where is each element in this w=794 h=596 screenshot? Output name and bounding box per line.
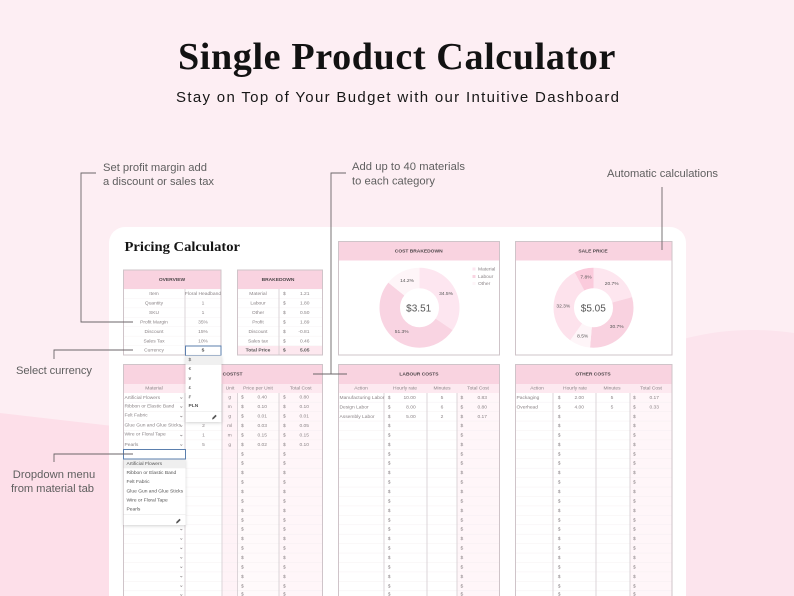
panel: other costs table — [516, 364, 672, 596]
panel: material costs table: 2 — [202, 423, 205, 429]
panel: material costs table: 0.15 — [299, 432, 309, 438]
panel: sale price chart — [516, 242, 672, 355]
panel: material costs table: $ — [241, 517, 244, 523]
panel: material costs table: ml — [227, 423, 232, 429]
panel: sale price chart: 7.8% — [580, 275, 592, 281]
panel: other costs table: $ — [633, 480, 636, 486]
panel: material costs table: Unit — [226, 386, 235, 392]
panel: brakedown: 1.80 — [300, 301, 310, 307]
panel: brakedown: 0.50 — [300, 310, 310, 316]
panel: material costs table: $ — [241, 461, 244, 467]
panel: other costs table: 0.33 — [649, 404, 659, 410]
panel: material costs table: $ — [283, 564, 286, 570]
panel: material costs table: 5 — [202, 442, 205, 448]
panel: material costs table: $ — [283, 395, 286, 401]
panel: other costs table: $ — [558, 555, 561, 561]
icon: pencil — [176, 519, 181, 524]
panel: material costs table: 0.80 — [299, 395, 309, 401]
panel: material costs table: 1 — [202, 432, 205, 438]
panel: other costs table: Packaging — [516, 395, 540, 401]
panel: labour costs table: $ — [388, 442, 391, 448]
callout: add materials: to each category — [352, 176, 435, 188]
panel: overview: Sales Tax — [143, 338, 165, 344]
panel: material costs table — [124, 364, 322, 596]
panel: material costs table: 0.05 — [299, 423, 309, 429]
panel: labour costs table: $ — [460, 498, 464, 504]
panel: other costs table: 0.17 — [649, 395, 659, 401]
panel: material costs table: $ — [283, 470, 286, 476]
panel: brakedown: Labour — [250, 301, 266, 307]
panel: material costs table: $ — [283, 574, 286, 580]
panel: other costs table: 2.00 — [574, 395, 584, 401]
panel: material costs table: $ — [241, 527, 244, 533]
panel: material costs table: $ — [283, 414, 286, 420]
panel: other costs table: $ — [633, 442, 636, 448]
panel: other costs table: $ — [633, 564, 636, 570]
panel: labour costs table: 10.00 — [403, 395, 416, 401]
currency dropdown — [186, 356, 222, 422]
panel: material costs table: 0.02 — [257, 442, 267, 448]
panel: material costs table: $ — [283, 451, 286, 457]
panel: material costs table: $ — [241, 480, 244, 486]
panel: other costs table: $ — [558, 395, 561, 401]
panel: labour costs table: $ — [460, 489, 464, 495]
callout: automatic calculations: Automatic calculations — [607, 168, 718, 180]
panel: other costs table: $ — [633, 470, 636, 476]
panel: labour costs table: 5.00 — [406, 414, 416, 420]
callout: add materials: Add up to 40 materials — [352, 161, 465, 173]
panel: overview — [124, 270, 221, 356]
panel: overview: 35% — [198, 320, 209, 326]
panel: labour costs table: LABOUR COSTS — [399, 372, 439, 378]
title: Single Product Calculator — [178, 36, 616, 78]
panel: other costs table: 5 — [611, 395, 614, 401]
panel: material costs table: $ — [241, 546, 244, 552]
callout: select currency: Select currency — [16, 365, 92, 377]
panel: other costs table: $ — [558, 432, 561, 438]
panel: labour costs table: 0.80 — [477, 404, 487, 410]
panel: other costs table: $ — [633, 527, 636, 533]
panel: other costs table: $ — [633, 432, 636, 438]
panel: other costs table: $ — [558, 470, 561, 476]
panel: other costs table: $ — [558, 574, 561, 580]
panel: labour costs table: 5 — [441, 395, 444, 401]
material dropdown: Ribbon or Elastic Band — [126, 470, 177, 476]
panel: other costs table: Minutes — [603, 386, 621, 392]
panel: labour costs table: Assembly Labor — [340, 414, 375, 420]
panel: other costs table: Total Cost — [640, 386, 663, 392]
panel: material costs table: $ — [283, 527, 286, 533]
panel: material costs table: $ — [241, 555, 244, 561]
callout: dropdown menu — [11, 454, 133, 495]
panel: material costs table: $ — [283, 508, 286, 514]
panel: other costs table: $ — [558, 583, 561, 589]
panel: material costs table: $ — [241, 451, 244, 457]
panel: labour costs table: $ — [388, 498, 391, 504]
panel: labour costs table: $ — [460, 395, 464, 401]
panel: labour costs table: $ — [388, 451, 391, 457]
panel: brakedown: $ — [283, 310, 286, 316]
panel: material costs table: $ — [283, 461, 286, 467]
panel: brakedown: $ — [283, 301, 286, 307]
panel: labour costs table: $ — [388, 508, 391, 514]
panel: cost breakdown chart: 14.2% — [400, 278, 415, 284]
panel: brakedown: Other — [252, 310, 264, 316]
panel: labour costs table: $ — [388, 574, 391, 580]
legend — [472, 267, 495, 287]
panel: material costs table: $ — [283, 583, 286, 589]
legend: Other — [478, 281, 491, 287]
panel: material costs table: 0.01 — [299, 414, 309, 420]
callout: select currency — [16, 350, 133, 377]
dashboard card — [109, 227, 686, 596]
panel: labour costs table: $ — [388, 564, 391, 570]
panel: other costs table: 5 — [611, 404, 614, 410]
panel: other costs table: $ — [558, 461, 561, 467]
currency dropdown: $ — [188, 357, 192, 363]
panel: labour costs table: $ — [460, 432, 464, 438]
subtitle: Stay on Top of Your Budget with our Intuitive Dashboard — [176, 89, 619, 106]
panel: labour costs table: $ — [460, 461, 464, 467]
panel: material costs table: $ — [241, 489, 244, 495]
currency dropdown: PLN — [188, 403, 199, 409]
currency dropdown: € — [188, 366, 192, 372]
panel: labour costs table: $ — [460, 574, 464, 580]
panel: material costs table: g — [228, 396, 231, 401]
panel: material costs table: g — [228, 415, 231, 420]
material dropdown — [124, 450, 186, 525]
panel: brakedown: 0.46 — [300, 338, 310, 344]
panel: other costs table: $ — [558, 451, 561, 457]
callout: profit margin: a discount or sales tax — [103, 176, 214, 188]
panel: material costs table: $ — [283, 517, 286, 523]
panel: labour costs table: Manufacturing Labor — [340, 395, 385, 401]
panel: other costs table: OTHER COSTS — [575, 372, 611, 378]
panel: labour costs table: $ — [460, 546, 464, 552]
panel: material costs table: Total Cost — [290, 386, 312, 392]
panel: material costs table: $ — [241, 414, 244, 420]
material dropdown: Artificial Flowers — [126, 461, 163, 467]
panel: material costs table: 0.10 — [299, 404, 309, 410]
panel: labour costs table: Action — [354, 386, 368, 392]
panel: material costs table: 0.40 — [257, 395, 267, 401]
panel: other costs table: $ — [558, 404, 561, 410]
panel: brakedown: Total Price — [246, 348, 271, 354]
panel: material costs table: $ — [283, 432, 286, 438]
panel: other costs table: $ — [633, 583, 636, 589]
panel: material costs table: $ — [241, 564, 244, 570]
panel: material costs table: Pearls — [124, 442, 139, 448]
panel: other costs table: $ — [558, 508, 561, 514]
currency dropdown: ₣ — [188, 395, 192, 401]
callout: dropdown menu: from material tab — [11, 483, 94, 495]
panel: other costs table: $ — [633, 574, 636, 580]
panel: labour costs table: $ — [388, 527, 391, 533]
panel: sale price chart: SALE PRICE — [578, 249, 608, 255]
panel: other costs table: $ — [633, 395, 636, 401]
panel: material costs table: $ — [241, 574, 244, 580]
panel: other costs table: $ — [633, 517, 636, 523]
panel: material costs table: $ — [241, 404, 244, 410]
panel: labour costs table: $ — [460, 583, 464, 589]
panel: overview: Profit Margin — [140, 320, 168, 326]
panel: material costs table: $ — [283, 546, 286, 552]
panel: material costs table: 0.10 — [299, 442, 309, 448]
material dropdown: Pearls — [126, 507, 141, 513]
panel: overview: 1 — [202, 310, 205, 316]
panel: material costs table: 0.10 — [257, 404, 267, 410]
panel: brakedown — [238, 270, 322, 355]
panel: overview: Floral Headband — [185, 291, 221, 297]
panel: overview: 10% — [198, 338, 209, 344]
panel: labour costs table: $ — [388, 423, 391, 429]
panel: brakedown: BRAKEDOWN — [262, 277, 295, 283]
panel: material costs table: $ — [283, 480, 286, 486]
panel: sale price chart: 8.5% — [577, 334, 589, 340]
material dropdown: Felt Fabric — [126, 479, 150, 485]
panel: labour costs table: Hourly rate — [393, 386, 417, 392]
panel: labour costs table: $ — [388, 432, 391, 438]
panel: other costs table: $ — [633, 451, 636, 457]
panel: labour costs table: $ — [388, 414, 391, 420]
donut: cost breakdown — [390, 278, 449, 337]
panel: other costs table: $ — [558, 442, 561, 448]
panel: material costs table: m — [228, 405, 232, 410]
panel: other costs table: $ — [558, 517, 561, 523]
legend: Material — [478, 267, 495, 273]
callout: add materials — [313, 161, 465, 374]
panel: material costs table: $ — [241, 442, 244, 448]
panel: labour costs table: $ — [460, 480, 464, 486]
panel: labour costs table: $ — [388, 583, 391, 589]
callout: automatic calculations — [607, 168, 718, 250]
panel: labour costs table: 0.83 — [477, 395, 487, 401]
panel: brakedown: Material — [249, 291, 267, 297]
panel: other costs table: $ — [558, 414, 561, 420]
panel: material costs table: $ — [241, 423, 244, 429]
panel: cost breakdown chart: 51.3% — [395, 329, 409, 335]
panel: other costs table: $ — [558, 423, 561, 429]
panel: sale price chart: 30.7% — [610, 324, 624, 330]
panel: other costs table: $ — [558, 480, 561, 486]
material dropdown: Wire or Floral Tape — [126, 498, 168, 504]
panel: material costs table: $ — [241, 536, 244, 542]
card heading: Pricing Calculator — [124, 240, 240, 255]
panel: other costs table: 4.00 — [574, 404, 584, 410]
panel: material costs table: $ — [241, 470, 244, 476]
panel: cost breakdown chart: COST BRAKEDOWN — [395, 249, 443, 255]
panel: other costs table: $ — [633, 536, 636, 542]
panel: material costs table: g — [228, 443, 231, 448]
panel: overview: Discount — [144, 329, 164, 335]
panel: labour costs table: $ — [460, 536, 464, 542]
panel: other costs table: $ — [558, 498, 561, 504]
panel: labour costs table: 6 — [441, 404, 444, 410]
panel: labour costs table: Minutes — [433, 386, 451, 392]
currency dropdown: £ — [188, 385, 192, 391]
panel: other costs table: $ — [558, 536, 561, 542]
panel: labour costs table: Total Cost — [467, 386, 490, 392]
panel: labour costs table: $ — [388, 480, 391, 486]
panel: labour costs table: $ — [460, 517, 464, 523]
panel: other costs table: Overhead — [516, 404, 538, 410]
panel: sale price chart: 20.7% — [605, 281, 619, 287]
panel: labour costs table: $ — [388, 517, 391, 523]
panel: brakedown: 1.89 — [300, 320, 310, 326]
panel: labour costs table: $ — [460, 470, 464, 476]
panel: other costs table: $ — [633, 489, 636, 495]
panel: labour costs table: $ — [388, 470, 391, 476]
panel: brakedown: $ — [283, 320, 286, 326]
panel: labour costs table: $ — [460, 423, 464, 429]
panel: material costs table: Material — [145, 386, 163, 392]
panel: material costs table: Felt Fabric — [124, 413, 148, 419]
panel: overview: Currency — [144, 348, 164, 354]
panel: other costs table: $ — [633, 555, 636, 561]
panel: material costs table: 0.01 — [257, 414, 267, 420]
panel: sale price chart: 32.3% — [556, 303, 571, 309]
panel: overview: OVERVIEW — [159, 277, 186, 283]
currency dropdown: ¥ — [188, 376, 192, 382]
panel: other costs table: $ — [633, 414, 636, 420]
panel: other costs table: $ — [633, 404, 636, 410]
panel: labour costs table: $ — [388, 395, 391, 401]
panel: brakedown: Profit — [252, 320, 264, 326]
panel: material costs table: $ — [283, 423, 286, 429]
panel: brakedown: $ — [283, 338, 286, 344]
panel: material costs table: Glue Gun and Glue Sticks — [124, 422, 182, 428]
panel: material costs table: 0.15 — [257, 432, 267, 438]
panel: material costs table: Artificial Flowers — [124, 395, 161, 401]
panel: labour costs table: $ — [388, 555, 391, 561]
panel: material costs table: $ — [241, 395, 244, 401]
panel: other costs table: $ — [633, 461, 636, 467]
panel: material costs table: $ — [241, 432, 244, 438]
panel: overview: Item — [149, 291, 159, 297]
panel: brakedown: $ — [283, 348, 286, 354]
panel: labour costs table: 0.17 — [477, 414, 487, 420]
material dropdown: Glue Gun and Glue Sticks — [126, 488, 184, 494]
panel: overview: SKU — [149, 310, 159, 316]
panel: labour costs table: $ — [388, 546, 391, 552]
panel: material costs table: Ribbon or Elastic Band — [124, 404, 175, 410]
panel: brakedown: $ — [283, 291, 286, 297]
callout: profit margin — [81, 162, 214, 322]
panel: labour costs table: $ — [460, 414, 464, 420]
panel: other costs table: $ — [633, 508, 636, 514]
panel: other costs table: Action — [530, 386, 544, 392]
panel: brakedown: Discount — [248, 329, 268, 335]
panel: material costs table: Wire or Floral Tape — [124, 432, 166, 438]
panel: other costs table: $ — [633, 498, 636, 504]
icon: pencil — [212, 415, 217, 420]
panel: material costs table: Price per Unit — [243, 386, 273, 392]
panel: overview: 1 — [202, 301, 205, 307]
panel: brakedown: $ — [283, 329, 286, 335]
panel: material costs table: $ — [241, 508, 244, 514]
panel: material costs table: m — [228, 433, 232, 438]
panel: other costs table: $ — [558, 546, 561, 552]
panel: material costs table: $ — [283, 404, 286, 410]
panel: other costs table: $ — [633, 546, 636, 552]
panel: material costs table: 0.03 — [257, 423, 267, 429]
panel: labour costs table: $ — [460, 508, 464, 514]
panel: labour costs table: $ — [460, 527, 464, 533]
panel: labour costs table: $ — [388, 461, 391, 467]
callout: profit margin: Set profit margin add — [103, 162, 207, 174]
panel: cost breakdown chart: 34.5% — [439, 291, 454, 297]
callout: dropdown menu: Dropdown menu — [13, 469, 95, 481]
panel: labour costs table: $ — [388, 404, 391, 410]
panel: brakedown: 1.21 — [300, 291, 310, 297]
panel: labour costs table: $ — [460, 442, 464, 448]
panel: sale price chart: $5.05 — [581, 304, 606, 314]
panel: other costs table: $ — [633, 423, 636, 429]
panel: labour costs table: $ — [460, 555, 464, 561]
panel: labour costs table: 8.00 — [406, 404, 416, 410]
panel: labour costs table: $ — [388, 489, 391, 495]
panel: overview: $ — [202, 348, 205, 354]
panel: material costs table: $ — [283, 555, 286, 561]
panel: cost breakdown chart — [338, 242, 500, 355]
panel: material costs table: $ — [283, 442, 286, 448]
panel: labour costs table: $ — [388, 536, 391, 542]
panel: other costs table: $ — [558, 527, 561, 533]
panel: material costs table: $ — [283, 498, 286, 504]
panel: labour costs table: $ — [460, 404, 464, 410]
panel: material costs table: $ — [283, 489, 286, 495]
panel: labour costs table: $ — [460, 564, 464, 570]
donut: sale price — [564, 278, 623, 337]
panel: material costs table: $ — [241, 498, 244, 504]
panel: material costs table: $ — [283, 536, 286, 542]
panel: brakedown: -0.81 — [298, 329, 310, 335]
panel: material costs table: $ — [241, 583, 244, 589]
panel: cost breakdown chart: $3.51 — [406, 304, 432, 314]
panel: labour costs table: 2 — [441, 414, 444, 420]
panel: overview: 15% — [198, 329, 209, 335]
panel: labour costs table — [338, 364, 500, 596]
panel: brakedown: Sales tax — [248, 338, 269, 344]
panel: brakedown: 5.05 — [300, 348, 310, 354]
panel: material costs table: MATERIAL COSTST — [196, 372, 243, 378]
panel: other costs table: $ — [558, 564, 561, 570]
panel: other costs table: $ — [558, 489, 561, 495]
panel: labour costs table: Design Labor — [340, 404, 369, 410]
panel: overview: Quantity — [145, 301, 164, 307]
legend: Labour — [478, 274, 494, 280]
panel: labour costs table: $ — [460, 451, 464, 457]
panel: other costs table: Hourly rate — [563, 386, 587, 392]
